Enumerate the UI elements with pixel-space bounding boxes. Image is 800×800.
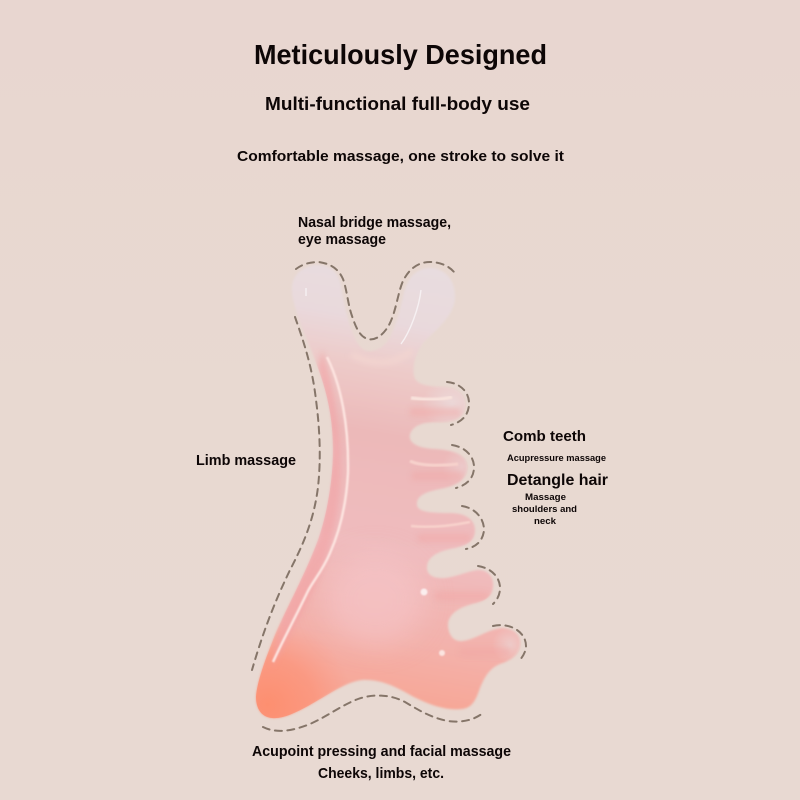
label: nasal bridge massage: eye massage: [298, 231, 386, 248]
prong highlights: [306, 288, 421, 344]
gua sha massage tool: [254, 266, 521, 720]
shading and highlights: [256, 354, 520, 718]
dashed outline: comb tooth 5: [493, 625, 526, 662]
label: nasal bridge massage: Nasal bridge massage,: [298, 214, 451, 231]
label: acupoint pressing: Cheeks, limbs, etc.: [318, 765, 444, 782]
title: Meticulously Designed: [254, 39, 547, 70]
dashed outline: left edge: [252, 317, 320, 670]
label: massage shoulders and neck: Massage: [525, 492, 566, 503]
dashed outline: comb tooth 1: [447, 382, 469, 425]
dashed outline: top prongs: [296, 262, 454, 339]
label: acupressure massage: Acupressure massage: [507, 453, 606, 464]
label: massage shoulders and neck: shoulders and: [512, 504, 577, 515]
dashed outline: comb tooth 3: [462, 506, 484, 549]
label: massage shoulders and neck: neck: [534, 516, 557, 527]
tagline: Comfortable massage, one stroke to solve it: [237, 148, 564, 165]
subtitle: Multi-functional full-body use: [265, 93, 530, 114]
label: limb massage: Limb massage: [196, 452, 296, 469]
label: acupoint pressing: Acupoint pressing and facial massage: [252, 743, 511, 760]
label: detangle hair: Detangle hair: [507, 472, 608, 489]
dashed outline: comb tooth 2: [452, 445, 474, 488]
label: comb teeth: Comb teeth: [503, 428, 586, 445]
dashed outline: bottom edge: [263, 696, 483, 731]
dashed outline: comb tooth 4: [478, 566, 500, 604]
tool body: [256, 265, 520, 718]
